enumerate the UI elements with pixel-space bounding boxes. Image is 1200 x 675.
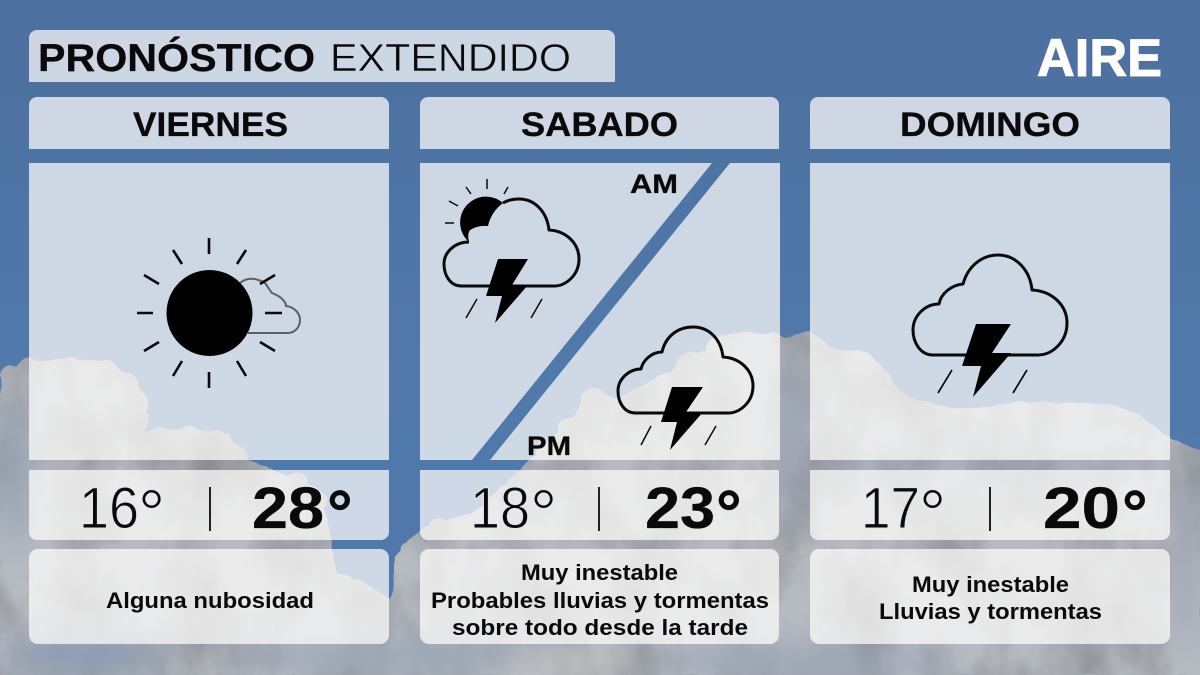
temperatures: viernes: 28 <box>252 476 324 541</box>
weather panel: viernes <box>29 163 389 460</box>
heading: sabado <box>420 97 779 149</box>
description: viernes: Alguna nubosidad <box>106 588 314 613</box>
description: viernes <box>29 549 389 644</box>
weather panel: sabado AM <box>420 163 712 460</box>
weather panel: sabado PM <box>490 163 780 461</box>
description: sabado: Probables lluvias y tormentas <box>431 588 769 613</box>
panel: viernes <box>29 97 389 644</box>
icon: sun with small cloud <box>137 238 300 388</box>
temperatures: sabado: ° <box>530 476 557 552</box>
temperatures: viernes: ° <box>138 476 165 552</box>
label: PM: PM <box>527 431 571 461</box>
temperatures: viernes: 16 <box>79 476 139 541</box>
label: AM: AM <box>630 169 678 199</box>
temperatures: domingo: 20 <box>1043 476 1120 541</box>
temperatures: domingo: ° <box>1122 477 1148 549</box>
weather panel: domingo <box>810 163 1170 460</box>
panel: domingo <box>810 97 1170 644</box>
temperatures: domingo: ° <box>919 476 946 552</box>
heading: domingo: DOMINGO <box>900 106 1080 144</box>
description: sabado: Muy inestable <box>521 560 678 585</box>
temperatures: sabado: 18 <box>470 476 530 541</box>
temperatures: sabado: 23 <box>645 476 715 541</box>
logo: AIRE: AIRE <box>1037 29 1162 88</box>
temperatures: viernes: ° <box>327 477 353 549</box>
icon: storm cloud <box>913 255 1067 397</box>
icon: storm cloud PM <box>618 327 753 450</box>
temperatures: domingo <box>810 470 1170 552</box>
description: sabado <box>420 549 779 644</box>
icon: sun behind storm cloud <box>444 179 579 323</box>
heading: sabado: SABADO <box>521 106 678 144</box>
heading: domingo <box>810 97 1170 149</box>
heading: viernes: VIERNES <box>133 106 288 144</box>
panel: sabado <box>420 97 780 644</box>
description: domingo <box>810 549 1170 644</box>
title bar: EXTENDIDO <box>330 37 571 80</box>
temperatures: sabado: ° <box>716 477 742 549</box>
description: domingo: Muy inestable <box>912 572 1069 597</box>
title bar: PRONÓSTICO <box>38 36 315 80</box>
description: sabado: sobre todo desde la tarde <box>452 615 748 640</box>
title bar <box>29 30 615 82</box>
heading: viernes <box>29 97 389 149</box>
temperatures: viernes <box>29 470 389 552</box>
temperatures: domingo: 17 <box>861 476 920 541</box>
temperatures: sabado <box>420 470 779 552</box>
description: domingo: Lluvias y tormentas <box>879 599 1102 624</box>
